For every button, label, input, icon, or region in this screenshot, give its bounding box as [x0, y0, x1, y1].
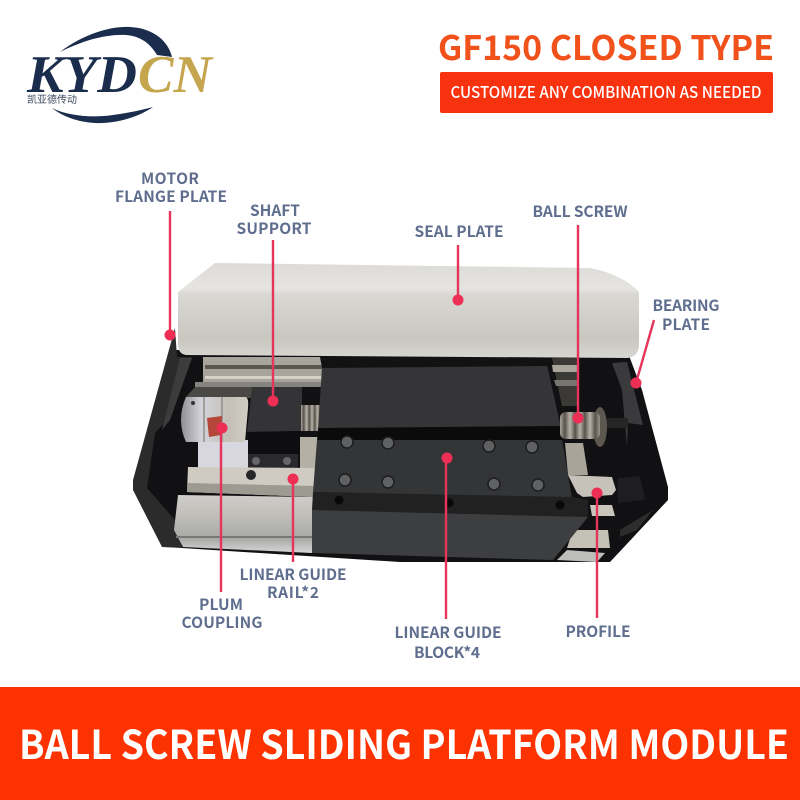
plum coupling — [181, 397, 248, 442]
callout: linear guide block: BLOCK*4 — [414, 641, 480, 663]
callout: motor flange plate — [115, 167, 227, 340]
callout: profile — [566, 488, 630, 642]
logo Chinese name: 凯亚德传动 — [27, 91, 77, 106]
callout: bearing plate — [630, 294, 720, 388]
right interior rail — [552, 358, 577, 406]
seal plate cover — [178, 263, 639, 358]
subtitle button: CUSTOMIZE ANY COMBINATION AS NEEDED — [450, 79, 762, 103]
logo wordmark gold: CN — [138, 46, 214, 104]
carriage top plate — [318, 365, 561, 431]
callout: plum coupling: COUPLING — [182, 611, 262, 633]
right ball screw — [560, 407, 628, 447]
carriage bolts — [339, 436, 544, 491]
logo wordmark navy: KYD — [26, 46, 137, 104]
callout: profile: PROFILE — [566, 620, 630, 642]
callout: ball screw — [532, 200, 628, 424]
white patch below coupling — [198, 440, 248, 468]
callout: linear guide rail — [240, 474, 346, 603]
left end plate — [133, 328, 192, 548]
callout: ball screw: BALL SCREW — [532, 200, 628, 222]
shaft support — [247, 387, 302, 432]
callout: motor flange plate: FLANGE PLATE — [115, 185, 227, 207]
rail bolts — [248, 453, 298, 468]
carriage front face — [312, 510, 588, 560]
callout: linear guide block: LINEAR GUIDE — [394, 621, 502, 643]
front linear guide rail — [187, 467, 315, 497]
bottom banner — [0, 687, 800, 800]
title: GF150 CLOSED TYPE — [438, 21, 774, 70]
carriage clamp bar — [312, 492, 588, 517]
carriage lower plate — [313, 440, 572, 498]
callout: shaft support — [236, 199, 312, 406]
right end plate inner panel — [612, 362, 643, 447]
carriage black strip — [317, 426, 563, 441]
subtitle button — [440, 72, 773, 113]
light panel beside rail — [300, 437, 318, 469]
rear rail — [203, 357, 323, 384]
callout: bearing plate: PLATE — [662, 313, 710, 335]
left ball screw — [301, 405, 323, 431]
product photo: ball screw module — [133, 263, 668, 562]
interior background — [140, 350, 668, 562]
callout: shaft support: SHAFT — [250, 199, 300, 221]
right aluminium parts — [565, 443, 588, 475]
callout: seal plate: SEAL PLATE — [414, 220, 504, 242]
callout: motor flange plate: MOTOR — [141, 167, 199, 189]
callout: bearing plate: BEARING — [652, 294, 720, 316]
callout: plum coupling — [182, 422, 262, 633]
callout: linear guide block — [394, 452, 502, 663]
callout: shaft support: SUPPORT — [236, 217, 312, 239]
aluminium profile — [174, 495, 313, 553]
callout: linear guide rail: RAIL*2 — [267, 581, 319, 603]
logo: KYDCN — [26, 27, 214, 123]
logo swoosh top — [60, 27, 172, 57]
callout: linear guide rail: LINEAR GUIDE — [240, 563, 346, 585]
logo swoosh bottom — [52, 107, 153, 123]
callout: seal plate — [414, 220, 504, 306]
right rail end — [568, 475, 616, 497]
callout: plum coupling: PLUM — [199, 593, 243, 615]
